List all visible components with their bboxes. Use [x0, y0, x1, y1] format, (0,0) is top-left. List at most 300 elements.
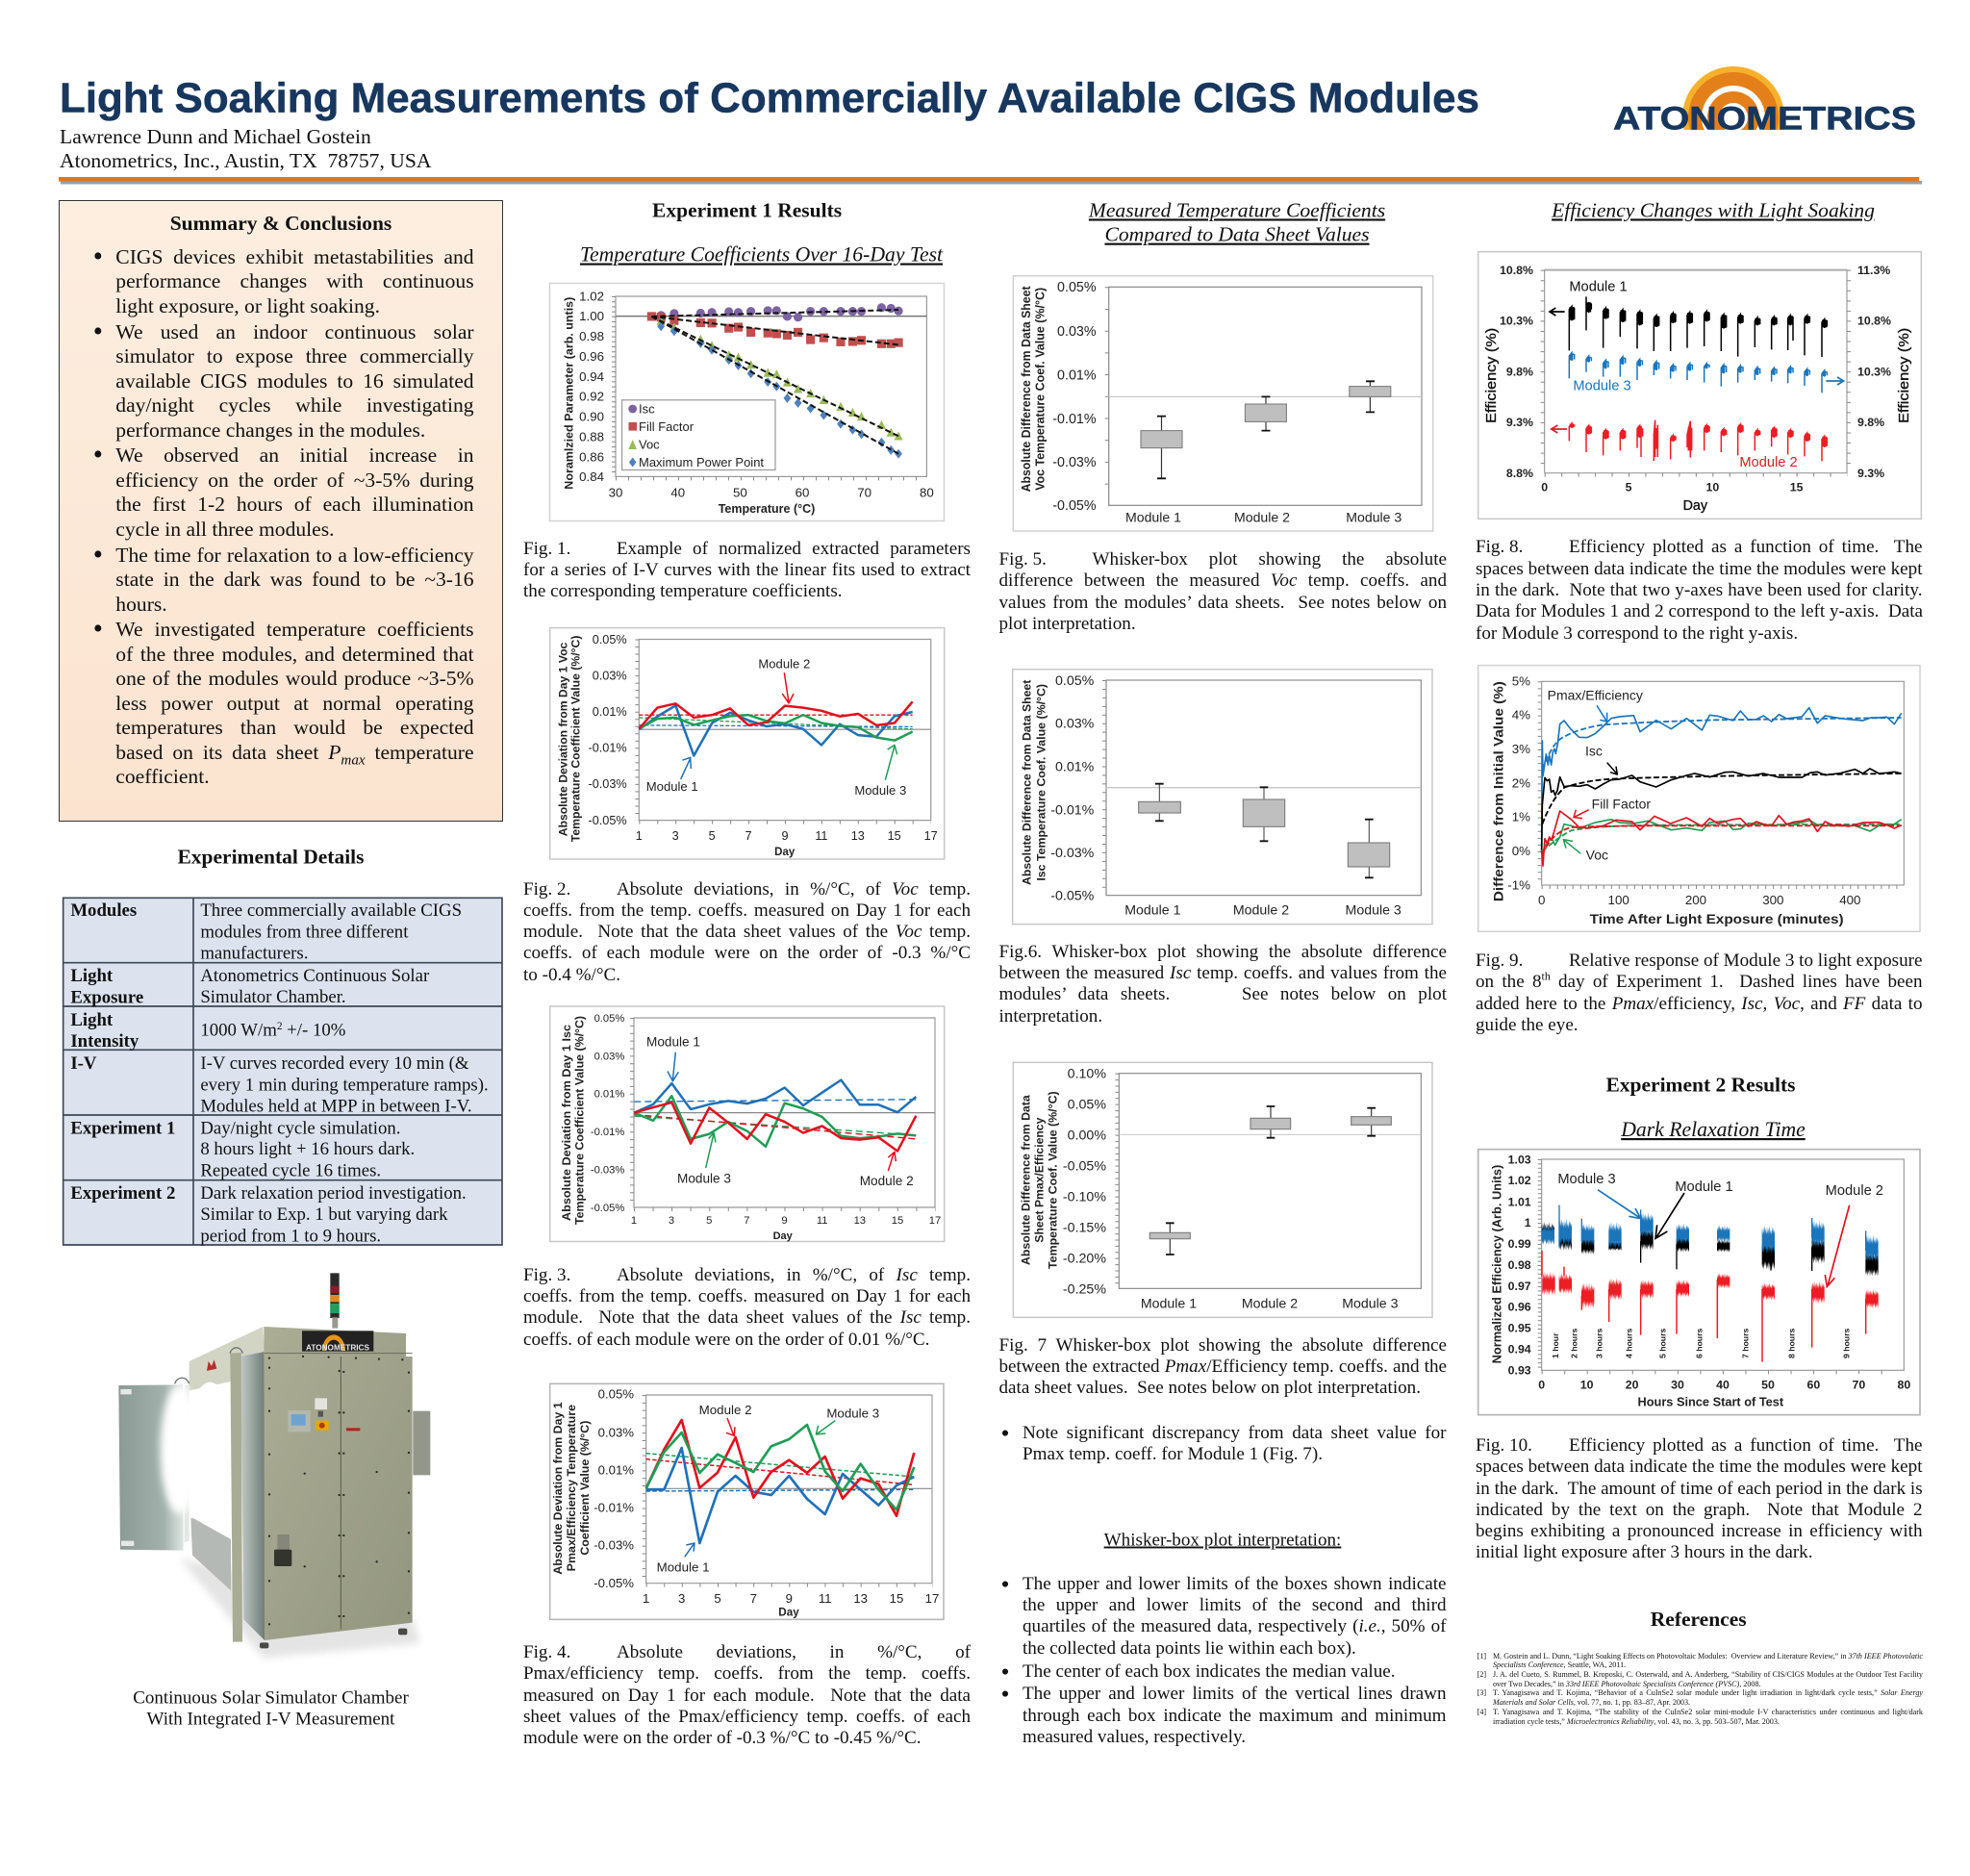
chart: Fig. 10 dark relaxation time: 10	[1580, 1378, 1594, 1391]
caption: Fig. 2: Fig. 2.	[523, 879, 570, 899]
panel: Summary & Conclusions: •	[93, 317, 103, 347]
caption: Fig. 2: coeffs. of each module were on the order of -0.3 %/°C	[523, 943, 971, 963]
bullet list: whisker-box interpretation	[1000, 1570, 1447, 1747]
bullet list: whisker-box interpretation: The center of each box indicates the median value.	[1023, 1661, 1396, 1682]
heading: Measured Temperature Coefficients Compared to Data Sheet Values: Measured Temperature Coefficients	[1088, 198, 1385, 221]
chart: Fig. 8 efficiency over days: 9.8%	[1506, 365, 1533, 378]
chart: Fig. 2 Voc deviations: 5	[709, 829, 716, 843]
chart: Fig. 2 Voc deviations: -0.05%	[588, 814, 627, 827]
table: experimental details: Exposure	[70, 988, 143, 1008]
caption: Fig. 7	[998, 1335, 1447, 1398]
chart: Fig. 8 efficiency over days: Efficiency (%)	[1484, 328, 1500, 423]
chart: Fig. 8 efficiency over days: 0	[1541, 481, 1548, 494]
authors	[60, 125, 432, 172]
table: experimental details: Experiment 1	[70, 1119, 175, 1139]
caption: Fig. 7: data sheet values. See notes below on plot interpretation.	[998, 1378, 1421, 1398]
chart: Fig. 10 dark relaxation time: 6 hours	[1694, 1329, 1704, 1358]
caption: Fig. 6: modules’ data sheets. See notes below on plot	[998, 984, 1447, 1004]
chart: Fig. 1 normalized parameters vs temperature: Noramlzied Parameter (arb. untis)	[563, 297, 576, 490]
chart: Fig. 7 whisker-box Pmax/efficiency: Module 2	[1242, 1296, 1298, 1311]
chart: Fig. 5 whisker-box Voc: -0.01%	[1052, 412, 1097, 427]
chart: Fig. 3 Isc deviations: Module 3	[677, 1172, 731, 1186]
chart: Fig. 2 Voc deviations: 15	[888, 829, 901, 843]
caption: Fig. 4	[523, 1642, 971, 1748]
chart: Fig. 3 Isc deviations: 3	[669, 1215, 674, 1227]
chart: Fig. 3 Isc deviations: Absolute Deviation from Day 1 Isc	[560, 1025, 573, 1221]
text: •	[1000, 1658, 1010, 1686]
caption: Fig. 1: Fig. 1.	[523, 539, 570, 559]
chart: Fig. 4 Pmax/efficiency deviations: Module 1	[657, 1559, 710, 1574]
chart: Fig. 4 Pmax/efficiency deviations: -0.05%	[594, 1576, 634, 1590]
bullet list: conclusions: of the three modules, and determined that	[115, 643, 474, 666]
caption: Fig. 8: Data for Modules 1 and 2 correspond to the left y-axis. Data	[1476, 601, 1923, 621]
chart: Fig. 10 dark relaxation time	[1478, 1150, 1920, 1415]
chart: Fig. 4 Pmax/efficiency deviations: -0.01%	[594, 1501, 634, 1515]
caption: Fig. 2: coeffs. from the temp. coeffs. measured on Day 1 for each	[523, 900, 971, 921]
chart: Fig. 6 whisker-box Isc: -0.05%	[1050, 889, 1095, 904]
caption: Fig. 4: module were on the order of -0.3 %/°C to -0.45 %/°C.	[523, 1728, 922, 1748]
caption: Fig. 2: module. Note that the data sheet values of the Voc temp.	[523, 922, 971, 942]
heading: Temperature Coefficients Over 16-Day Test: Temperature Coefficients Over 16-Day Test	[580, 242, 944, 266]
bullet list: conclusions: based on its data sheet Pmax temperature	[115, 741, 474, 768]
bullet list: conclusions: performance changes with continuous	[115, 269, 474, 292]
table: experimental details: Light	[70, 966, 114, 986]
chart: Fig. 10 dark relaxation time: 1.01	[1508, 1195, 1531, 1208]
logo: Atonometrics	[1614, 66, 1915, 130]
chart: Fig. 3 Isc deviations: 11	[817, 1215, 828, 1227]
text: •	[1000, 1419, 1010, 1447]
text: •	[1000, 1570, 1010, 1598]
chart: Fig. 3 Isc deviations: 0.01%	[594, 1089, 624, 1101]
caption: Fig. 9	[1476, 951, 1923, 1035]
chart: Fig. 4 Pmax/efficiency deviations: 11	[819, 1591, 831, 1606]
chart: Fig. 6 whisker-box Isc: Module 1	[1124, 903, 1181, 919]
chart: Fig. 7 whisker-box Pmax/efficiency: Temperature Coef. Value (%/°C)	[1047, 1091, 1060, 1269]
heading: Experiment 2 Results: Experiment 2 Results	[1605, 1074, 1796, 1097]
caption: Fig. 9: on the 8th day of Experiment 1. Dashed lines have been	[1476, 970, 1922, 992]
chart: Fig. 4 Pmax/efficiency deviations: Day	[778, 1606, 799, 1618]
chart: Fig. 10 dark relaxation time: 0.99	[1508, 1237, 1531, 1251]
chart: Fig. 5 whisker-box Voc: Absolute Difference from Data Sheet	[1020, 286, 1033, 492]
legend	[622, 400, 775, 469]
references list: [1]	[1478, 1652, 1486, 1661]
note: significant discrepancy: Pmax temp. coeff. for Module 1 (Fig. 7).	[1023, 1444, 1323, 1464]
chart: Fig. 9 response to light exposure: 100	[1608, 893, 1629, 907]
chart: Fig. 2 Voc deviations: 13	[851, 829, 865, 843]
chart: Fig. 8 efficiency over days: Module 2	[1739, 455, 1798, 470]
chart: Fig. 3 Isc deviations: Module 2	[860, 1174, 914, 1188]
table: experimental details: Day/night cycle simulation.	[200, 1119, 400, 1139]
chart: Fig. 7 whisker-box Pmax/efficiency: -0.20%	[1063, 1251, 1106, 1266]
caption: Fig. 2: Absolute deviations, in %/°C, of Voc temp.	[617, 879, 971, 899]
chart: Fig. 10 dark relaxation time: Module 1	[1675, 1179, 1733, 1195]
caption: Fig. 5: difference between the measured Voc temp. coeffs. and	[998, 570, 1447, 591]
caption: Fig. 3: coeffs. from the temp. coeffs. measured on Day 1 for each	[523, 1286, 971, 1306]
chart: Fig. 1 normalized parameters vs temperature: 40	[670, 485, 685, 500]
table: experimental details	[63, 898, 502, 1246]
caption: Fig. 10: spaces between data indicate the time the modules were kept	[1476, 1457, 1922, 1477]
chart: Fig. 1 normalized parameters vs temperature: 0.84	[579, 469, 604, 484]
chart: Fig. 10 dark relaxation time: 60	[1806, 1378, 1820, 1391]
chart: Fig. 8 efficiency over days: 10.8%	[1500, 264, 1533, 277]
caption: Fig. 4: Pmax/efficiency temp. coeffs. from the temp. coeffs.	[523, 1663, 971, 1684]
chart: Fig. 1 normalized parameters vs temperature: 70	[857, 485, 871, 500]
heading: Efficiency Changes with Light Soaking: Efficiency Changes with Light Soaking	[1551, 198, 1875, 221]
chart: Fig. 10 dark relaxation time: 7 hours	[1740, 1329, 1750, 1358]
caption: Fig. 7: between the extracted Pmax/Efficiency temp. coeffs. and the	[998, 1356, 1447, 1377]
legend: Maximum Power Point	[639, 455, 764, 469]
chart: Fig. 2 Voc deviations: 0.01%	[593, 705, 627, 719]
caption: Fig. 6: interpretation.	[998, 1006, 1102, 1027]
bullet list: conclusions: CIGS devices exhibit metastabilities and	[115, 245, 474, 268]
caption: Fig. 2	[523, 879, 971, 985]
chart: Fig. 2 Voc deviations	[550, 628, 945, 859]
table: experimental details: Atonometrics Continuous Solar	[200, 966, 430, 986]
bullet list: conclusions: one of the modules would produce ~3-5%	[115, 667, 474, 690]
image: solar simulator chamber illustration	[118, 1273, 430, 1658]
chart: Fig. 9 response to light exposure: 0	[1538, 893, 1545, 907]
bullet list: conclusions: efficiency on the order of ~3-5% during	[115, 469, 474, 492]
chart: Fig. 8 efficiency over days: 10.3%	[1500, 315, 1533, 328]
chart: Fig. 7 whisker-box Pmax/efficiency: Absolute Difference from Data	[1020, 1095, 1033, 1265]
caption: Fig. 1: for a series of I-V curves with the linear fits used to extract	[523, 560, 971, 580]
chart: Fig. 7 whisker-box Pmax/efficiency: 0.00%	[1068, 1128, 1106, 1143]
chart: Fig. 1 normalized parameters vs temperature: 0.96	[579, 349, 604, 364]
note: significant discrepancy	[1000, 1419, 1447, 1464]
chart: Fig. 3 Isc deviations: Day	[773, 1230, 794, 1242]
chart: Fig. 4 Pmax/efficiency deviations: 13	[853, 1591, 868, 1606]
caption: Fig. 8: Efficiency plotted as a function of time. The	[1569, 537, 1922, 557]
legend: Isc	[639, 402, 655, 417]
chart: Fig. 9 response to light exposure: Time After Light Exposure (minutes)	[1590, 911, 1844, 926]
references list: M. Gostein and L. Dunn, “Light Soaking Effects on Photovoltaic Modules: Overview and Literature Review,” in 37th IEEE Photovolatic	[1493, 1652, 1923, 1661]
chart: Fig. 10 dark relaxation time: 9 hours	[1842, 1329, 1852, 1358]
chart: Fig. 4 Pmax/efficiency deviations: 0.05%	[598, 1387, 634, 1402]
authors: Lawrence Dunn and Michael Gostein	[60, 125, 371, 148]
chart: Fig. 1 normalized parameters vs temperature: 0.98	[579, 329, 604, 343]
logo: Atonometrics: ATONOMETRICS	[1613, 100, 1916, 137]
caption: Fig. 5: Whisker-box plot showing the absolute	[1093, 549, 1447, 570]
table: experimental details: Intensity	[70, 1031, 139, 1052]
table: experimental details: Similar to Exp. 1 but varying dark	[200, 1204, 448, 1225]
chart: Fig. 10 dark relaxation time: Hours Since Start of Test	[1637, 1396, 1784, 1409]
chart: Fig. 4 Pmax/efficiency deviations: 9	[786, 1591, 793, 1606]
caption: Fig. 1: Example of normalized extracted parameters	[617, 539, 971, 559]
caption: Fig. 5: plot interpretation.	[998, 614, 1136, 634]
chart: Fig. 1 normalized parameters vs temperature: 50	[733, 485, 747, 500]
chart: Fig. 3 Isc deviations: 13	[854, 1215, 866, 1227]
chart: Fig. 4 Pmax/efficiency deviations: -0.03%	[594, 1538, 634, 1553]
chart: Fig. 9 response to light exposure: 3%	[1512, 742, 1530, 756]
bullet list: conclusions: state in the dark was found to be ~3-16	[115, 568, 474, 591]
caption: Fig. 1	[523, 539, 971, 601]
caption: Fig. 3	[523, 1265, 971, 1350]
chart: Fig. 6 whisker-box Isc: -0.01%	[1050, 802, 1095, 818]
bullet list: whisker-box interpretation: the upper and lower limits of the second and third	[1023, 1595, 1447, 1615]
chart: Fig. 3 Isc deviations: Module 1	[646, 1034, 700, 1049]
legend: Voc	[639, 438, 660, 452]
chart: Fig. 3 Isc deviations: -0.01%	[591, 1127, 624, 1138]
chart: Fig. 6 whisker-box Isc: 0.05%	[1055, 673, 1095, 689]
chart: Fig. 3 Isc deviations: 17	[929, 1215, 941, 1227]
chart: Fig. 10 dark relaxation time: 8 hours	[1787, 1329, 1797, 1358]
chart: Fig. 5 whisker-box Voc: -0.05%	[1052, 498, 1097, 514]
table: experimental details: Modules	[70, 900, 137, 921]
chart: Fig. 4 Pmax/efficiency deviations: 5	[714, 1591, 721, 1606]
caption: Fig. 9: added here to the Pmax/efficiency, Isc, Voc, and FF data to	[1476, 994, 1923, 1014]
caption: Fig. 8	[1476, 537, 1923, 644]
references list: irradiation cycle tests,” Microelectronics Reliability, vol. 43, no. 3, pp. 503–507, Mar. 2003.	[1493, 1717, 1780, 1726]
chart: Fig. 3 Isc deviations: 1	[631, 1215, 637, 1227]
chart: Fig. 10 dark relaxation time: 3 hours	[1595, 1329, 1604, 1358]
caption: Fig. 9: Relative response of Module 3 to light exposure	[1569, 951, 1922, 971]
chart: Fig. 4 Pmax/efficiency deviations: Pmax/Efficiency Temperature	[565, 1405, 578, 1571]
chart: Fig. 4 Pmax/efficiency deviations: Module 3	[826, 1407, 879, 1421]
chart: Fig. 5 whisker-box Voc: Voc Temperature Coef. Value (%/°C)	[1033, 288, 1047, 491]
chart: Fig. 9 response to light exposure: 400	[1839, 893, 1860, 907]
chart: Fig. 5 whisker-box Voc: -0.03%	[1052, 455, 1097, 470]
panel: Summary & Conclusions	[59, 200, 503, 822]
chart: Fig. 3 Isc deviations	[550, 1006, 945, 1242]
chart: Fig. 1 normalized parameters vs temperature	[550, 283, 945, 521]
caption: Fig. 6: Fig.6. Whisker-box plot showing the absolute difference	[998, 942, 1447, 962]
chart: Fig. 2 Voc deviations: 11	[815, 829, 827, 843]
chart: Fig. 10 dark relaxation time: Normalized Efficiency (Arb. Units)	[1491, 1165, 1504, 1363]
chart: Fig. 7 whisker-box Pmax/efficiency: -0.05%	[1063, 1158, 1106, 1174]
legend: Fill Factor	[639, 419, 695, 434]
chart: Fig. 9 response to light exposure: Isc	[1585, 743, 1603, 758]
references list: [4]	[1478, 1708, 1486, 1716]
bullet list: conclusions: cycle in all three modules.	[115, 518, 335, 541]
chart: Fig. 2 Voc deviations: -0.01%	[588, 741, 627, 754]
chart: Fig. 6 whisker-box Isc: Module 2	[1233, 903, 1289, 919]
chart: Fig. 10 dark relaxation time: 0.95	[1508, 1322, 1531, 1335]
bullet list: conclusions: coefficient.	[115, 765, 210, 788]
chart: Fig. 10 dark relaxation time: 0.97	[1508, 1280, 1531, 1293]
chart: Fig. 2 Voc deviations: 17	[924, 829, 938, 843]
chart: Fig. 4 Pmax/efficiency deviations: Absolute Deviation from Day 1	[551, 1402, 565, 1575]
chart: Fig. 10 dark relaxation time: 20	[1626, 1378, 1639, 1391]
references list: [2]	[1478, 1670, 1486, 1679]
caption: Fig. 2: to -0.4 %/°C.	[523, 965, 620, 985]
chart: Fig. 7 whisker-box Pmax/efficiency: -0.15%	[1063, 1220, 1106, 1235]
chart: Fig. 5 whisker-box Voc: 0.05%	[1057, 280, 1097, 295]
chart: Fig. 10 dark relaxation time: 0	[1538, 1378, 1545, 1391]
caption: Fig. 8: spaces between data indicate the time the modules were kept	[1476, 559, 1922, 579]
chart: Fig. 2 Voc deviations: 0.03%	[593, 670, 627, 683]
text: •	[1000, 1680, 1010, 1708]
chart: Fig. 3 Isc deviations: 0.03%	[594, 1051, 624, 1062]
caption: Fig. 10: Fig. 10.	[1476, 1435, 1532, 1456]
chart: Fig. 9 response to light exposure: Voc	[1586, 847, 1608, 862]
chart: Fig. 1 normalized parameters vs temperature: 0.94	[579, 369, 604, 384]
chart: Fig. 4 Pmax/efficiency deviations: Module 2	[699, 1403, 752, 1417]
chart: Fig. 10 dark relaxation time: 0.98	[1508, 1258, 1531, 1272]
chart: Fig. 10 dark relaxation time: 1	[1525, 1216, 1531, 1230]
chart: Fig. 2 Voc deviations: Temperature Coefficient Value (%/°C)	[569, 636, 583, 842]
panel: Summary & Conclusions: •	[93, 440, 103, 470]
chart: Fig. 6 whisker-box Isc: Isc Temperature Coef. Value (%/°C)	[1035, 684, 1048, 881]
table: experimental details: modules from three different	[200, 922, 409, 942]
chart: Fig. 9 response to light exposure: 0%	[1512, 844, 1530, 858]
bullet list: conclusions: simulator to expose three commercially	[115, 344, 474, 368]
chart: Fig. 7 whisker-box Pmax/efficiency: 0.10%	[1068, 1067, 1106, 1082]
caption: Fig. 4: measured on Day 1 for each module. Note that the data	[523, 1686, 971, 1706]
chart: Fig. 1 normalized parameters vs temperature: 80	[920, 485, 934, 500]
references list: T. Yanagisawa and T. Kojima, “The stability of the CuInSe2 solar mini-module I-V characteristics under continuous and light/dark	[1493, 1708, 1923, 1716]
chart: Fig. 7 whisker-box Pmax/efficiency: -0.10%	[1063, 1189, 1106, 1204]
caption: Fig. 9: Fig. 9.	[1476, 951, 1523, 971]
caption: Fig. 8: for Module 3 correspond to the right y-axis.	[1476, 623, 1798, 644]
chart: Fig. 9 response to light exposure: -1%	[1507, 877, 1530, 892]
chart: Fig. 8 efficiency over days: 8.8%	[1506, 467, 1533, 480]
chart: Fig. 3 Isc deviations: -0.05%	[591, 1203, 624, 1214]
bullet list: conclusions	[93, 241, 474, 788]
chart: Fig. 4 Pmax/efficiency deviations: Coefficient Value (%/°C)	[578, 1421, 592, 1556]
chart: Fig. 10 dark relaxation time: 5 hours	[1658, 1329, 1668, 1358]
panel: Summary & Conclusions: •	[93, 540, 103, 570]
chart: Fig. 10 dark relaxation time: 70	[1852, 1378, 1865, 1391]
caption: Fig. 10: in the dark. The amount of time of each period in the dark is	[1476, 1479, 1923, 1499]
caption: Fig. 4: sheet values of the Pmax/efficiency temp. coeffs. of each	[523, 1707, 971, 1727]
chart: Fig. 2 Voc deviations: 9	[781, 829, 789, 843]
caption: Fig. 6: between the measured Isc temp. coeffs. and values from the	[998, 963, 1447, 983]
table: experimental details: 8 hours light + 16 hours dark.	[200, 1139, 415, 1159]
caption: Fig. 5	[998, 549, 1447, 634]
caption: Fig. 1: the corresponding temperature coefficients.	[523, 581, 843, 601]
chart: Fig. 4 Pmax/efficiency deviations: 3	[678, 1591, 685, 1606]
chart: Fig. 2 Voc deviations: Absolute Deviation from Day 1 Voc	[556, 642, 569, 836]
bullet list: conclusions: hours.	[115, 593, 167, 616]
references list: over Two Decades,” in 33rd IEEE Photovoltaic Specialists Conference (PVSC), 2008.	[1493, 1680, 1761, 1688]
chart: Fig. 1 normalized parameters vs temperature: 0.86	[579, 449, 604, 464]
chart: Fig. 9 response to light exposure: Fill Factor	[1592, 797, 1651, 812]
chart: Fig. 4 Pmax/efficiency deviations: 0.01%	[598, 1462, 634, 1477]
chart: Fig. 10 dark relaxation time: 1.03	[1508, 1153, 1531, 1166]
chart: Fig. 1 normalized parameters vs temperature: 0.90	[579, 410, 604, 424]
caption: chamber	[133, 1688, 409, 1729]
chart: Fig. 8 efficiency over days: Module 3	[1573, 379, 1631, 394]
heading: Whisker-box plot interpretation: Whisker-box plot interpretation:	[1104, 1530, 1341, 1551]
chart: Fig. 5 whisker-box Voc: 0.01%	[1057, 368, 1097, 383]
chart: Fig. 1 normalized parameters vs temperature: 60	[796, 485, 809, 500]
chart: Fig. 8 efficiency over days	[1478, 252, 1921, 519]
chart: Fig. 8 efficiency over days: 10.3%	[1857, 365, 1891, 378]
bullet list: whisker-box interpretation: The upper and lower limits of the boxes shown indicate	[1023, 1574, 1447, 1594]
table: experimental details: I-V curves recorded every 10 min (&	[200, 1053, 469, 1074]
bullet list: whisker-box interpretation: the collected data points lie within each box).	[1023, 1638, 1356, 1659]
bullet list: conclusions: The time for relaxation to a low-efficiency	[115, 544, 474, 567]
caption: Fig. 3: module. Note that the data sheet values of the Isc temp.	[523, 1307, 971, 1328]
chart: Fig. 6 whisker-box Isc: 0.01%	[1055, 760, 1095, 775]
chart: Fig. 8 efficiency over days: 5	[1626, 481, 1632, 494]
chart: Fig. 2 Voc deviations: Module 3	[854, 783, 906, 798]
heading: References: References	[1651, 1608, 1747, 1631]
title: Light Soaking Measurements of Commercially Available CIGS Modules	[60, 75, 1479, 121]
table: experimental details: +/- 10%	[282, 1021, 345, 1041]
chart: Fig. 4 Pmax/efficiency deviations: 1	[643, 1591, 649, 1606]
chart: Fig. 8 efficiency over days: 11.3%	[1857, 264, 1890, 277]
table: experimental details: every 1 min during temperature ramps).	[200, 1075, 489, 1095]
chart: Fig. 10 dark relaxation time: 4 hours	[1625, 1329, 1634, 1358]
chart: Fig. 10 dark relaxation time: 50	[1761, 1378, 1775, 1391]
heading: Dark Relaxation Time: Dark Relaxation Time	[1620, 1118, 1806, 1141]
chart: Fig. 9 response to light exposure: 1%	[1512, 810, 1530, 824]
chart: Fig. 2 Voc deviations: Day	[774, 847, 796, 858]
chart: Fig. 6 whisker-box Isc: 0.03%	[1055, 717, 1095, 732]
caption: Fig. 7: Fig. 7 Whisker-box plot showing the absolute difference	[998, 1335, 1447, 1356]
bullet list: whisker-box interpretation: quartiles of the measured data, respectively (i.e., 50% of	[1023, 1616, 1446, 1636]
chart: Fig. 1 normalized parameters vs temperature: 30	[609, 485, 622, 500]
caption: Fig. 8: in the dark. Note that two y-axes have been used for clarity.	[1476, 580, 1922, 600]
caption: Fig. 9: guide the eye.	[1476, 1015, 1579, 1035]
caption: Fig. 3: Absolute deviations, in %/°C, of Isc temp.	[617, 1265, 971, 1285]
chart: Fig. 10 dark relaxation time: Module 3	[1557, 1172, 1616, 1187]
chart: Fig. 10 dark relaxation time: 30	[1671, 1378, 1684, 1391]
chart: Fig. 1 normalized parameters vs temperature: 0.88	[579, 430, 604, 444]
bullet list: conclusions: the first 1-2 hours of each illumination	[115, 493, 474, 516]
references list: J. A. del Cueto, S. Rummel, B. Kroposki, C. Osterwald, and A. Anderberg, “Stability of CIS/CIGS Modules at the Outdoor Test Facility	[1493, 1670, 1923, 1679]
chart: Fig. 2 Voc deviations: Module 2	[758, 656, 810, 672]
chart: Fig. 3 Isc deviations: 7	[744, 1215, 750, 1227]
chart: Fig. 2 Voc deviations: -0.03%	[588, 777, 627, 791]
image: solar simulator chamber illustration: ATONOMETRICS	[306, 1342, 369, 1352]
chart: Fig. 8 efficiency over days: 10	[1705, 481, 1719, 494]
caption: Fig. 4: Fig. 4.	[523, 1642, 570, 1662]
chart: Fig. 1 normalized parameters vs temperature: 0.92	[579, 390, 604, 404]
table: experimental details: Modules held at MPP in between I-V.	[200, 1096, 472, 1116]
table: experimental details: 2	[277, 1021, 283, 1032]
chart: Fig. 4 Pmax/efficiency deviations: 7	[750, 1591, 757, 1606]
caption: chamber: Continuous Solar Simulator Chamber	[133, 1688, 409, 1709]
chart: Fig. 9 response to light exposure: Difference from Initial Value (%)	[1490, 681, 1505, 901]
bullet list: conclusions: We used an indoor continuous solar	[115, 320, 474, 343]
chart: Fig. 4 Pmax/efficiency deviations: 17	[925, 1591, 939, 1606]
chart: Fig. 8 efficiency over days: 9.3%	[1857, 467, 1884, 480]
chart: Fig. 9 response to light exposure: 4%	[1512, 708, 1530, 723]
heading: Experimental Details: Experimental Details	[177, 846, 365, 869]
chart: Fig. 5 whisker-box Voc: Module 1	[1125, 510, 1181, 525]
chart: Fig. 1 normalized parameters vs temperature: 1.02	[579, 290, 604, 304]
bullet list: whisker-box interpretation: The upper and lower limits of the vertical lines drawn	[1023, 1684, 1447, 1704]
chart: Fig. 9 response to light exposure	[1478, 666, 1920, 931]
caption: Fig. 10: begins exhibiting a pronounced increase in efficiency with	[1476, 1521, 1922, 1541]
caption: Fig. 8: Fig. 8.	[1476, 537, 1523, 557]
panel: Summary & Conclusions: •	[93, 614, 103, 645]
chart: Fig. 5 whisker-box Voc: Module 2	[1234, 510, 1290, 525]
chart: Fig. 5 whisker-box Voc: Module 3	[1346, 510, 1402, 525]
chart: Fig. 7 whisker-box Pmax/efficiency: Module 3	[1342, 1296, 1399, 1311]
chart: Fig. 7 whisker-box Pmax/efficiency: 0.05%	[1068, 1097, 1106, 1112]
chart: Fig. 3 Isc deviations: 9	[781, 1215, 788, 1227]
bullet list: conclusions: We investigated temperature coefficients	[115, 618, 474, 641]
chart: Fig. 9 response to light exposure: Pmax/Efficiency	[1548, 688, 1643, 703]
bullet list: conclusions: performance changes in the modules.	[115, 418, 425, 442]
chart: Fig. 2 Voc deviations: 3	[672, 829, 679, 843]
chart: Fig. 10 dark relaxation time: 40	[1716, 1378, 1730, 1391]
chart: Fig. 2 Voc deviations: 1	[636, 829, 643, 843]
chart: Fig. 6 whisker-box Isc: -0.03%	[1050, 846, 1095, 861]
chart: Fig. 3 Isc deviations: -0.03%	[591, 1164, 624, 1176]
heading: Measured Temperature Coefficients Compared to Data Sheet Values	[1088, 198, 1385, 246]
caption: Fig. 10: initial light exposure after 3 hours in the dark.	[1476, 1542, 1812, 1562]
references list: Materials and Solar Cells, vol. 77, no. 1, pp. 83–87, Apr. 2003.	[1493, 1698, 1690, 1707]
chart: Fig. 8 efficiency over days: 9.8%	[1857, 416, 1884, 429]
chart: Fig. 10 dark relaxation time: 1.02	[1508, 1174, 1531, 1187]
chart: Fig. 2 Voc deviations: 0.05%	[593, 633, 627, 646]
chart: Fig. 1 normalized parameters vs temperature: Temperature (°C)	[719, 502, 815, 516]
note: significant discrepancy: Note significant discrepancy from data sheet value for	[1023, 1423, 1447, 1443]
